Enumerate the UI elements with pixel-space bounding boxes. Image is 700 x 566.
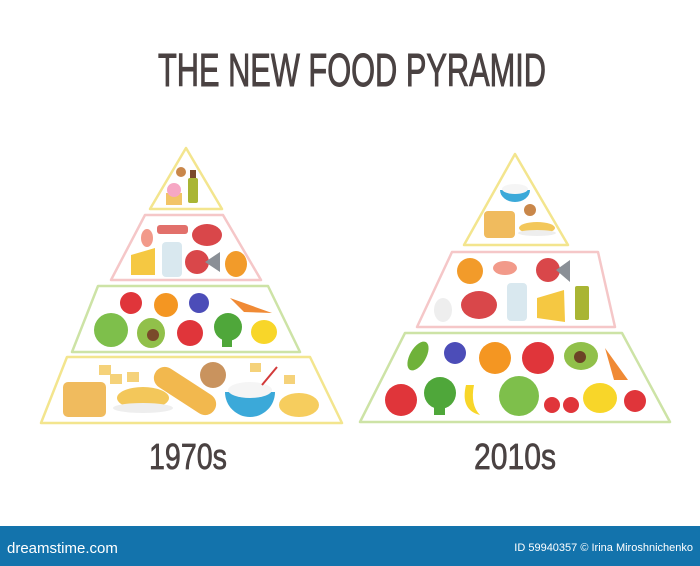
tier: fruits and vegetables xyxy=(72,286,300,352)
footer: brand: dreamstime.com xyxy=(7,540,118,557)
tier: grains xyxy=(464,154,568,245)
tier: fruits and vegetables xyxy=(360,333,670,422)
tier: protein and dairy xyxy=(417,252,615,327)
pyramid: 1970s xyxy=(41,148,342,423)
pyramid: 2010s xyxy=(360,154,670,422)
label: 1970s: 1970s xyxy=(149,436,227,477)
label: 2010s: 2010s xyxy=(474,436,556,477)
tier: meat and dairy xyxy=(111,215,261,280)
footer: credit: ID 59940357 © Irina Miroshnichenko xyxy=(514,542,693,554)
footer bar xyxy=(0,526,700,566)
tier: grains xyxy=(41,357,342,423)
tier: sweets and oils xyxy=(150,148,222,209)
